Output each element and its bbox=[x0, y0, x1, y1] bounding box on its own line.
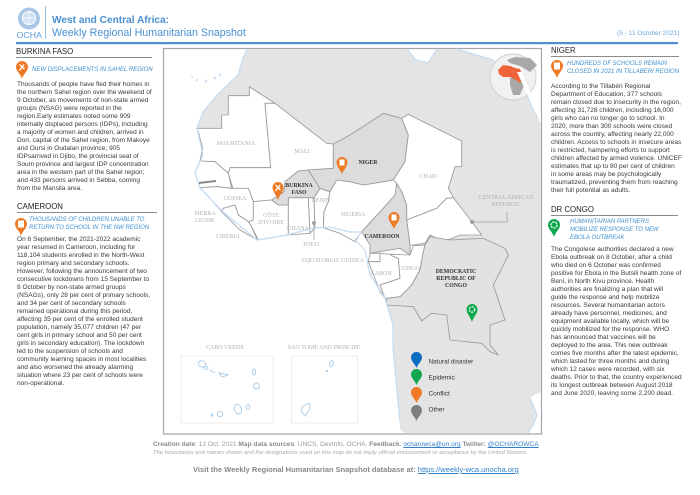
Equatorial Guinea bbox=[368, 253, 380, 262]
text: DR Congo: and June 2020, leaving some 2,200 dead. bbox=[551, 390, 673, 397]
country labels: BENIN bbox=[312, 198, 331, 204]
headline: DR Congo: HUMANITARIAN PARTNERS bbox=[570, 219, 649, 225]
text: Niger bbox=[551, 83, 682, 194]
text: DR Congo: guide the response and help mobilize bbox=[551, 294, 659, 301]
text: Cameroon: 118,104 students enrolled in the North-West bbox=[17, 252, 144, 259]
country labels: CONGO bbox=[398, 266, 420, 272]
subtitle: Weekly Regional Humanitarian Snapshot bbox=[52, 27, 246, 39]
headline: DR Congo bbox=[570, 218, 659, 241]
text: Cameroon: region primary and secondary schools. bbox=[17, 260, 129, 267]
Togo bbox=[308, 198, 315, 233]
text: Cameroon: consecutive lockdowns from 15 September to bbox=[17, 276, 149, 283]
pin: Cameroon schools bbox=[388, 212, 400, 229]
country labels: REPUBLIC bbox=[491, 202, 521, 208]
country labels: FASO bbox=[291, 190, 307, 196]
Cameroon bbox=[362, 183, 410, 255]
text: Cameroon: 8 October by non-state armed groups bbox=[17, 284, 126, 291]
text: Niger: 2020, more than 300 schools were closed bbox=[551, 123, 672, 130]
Central African borders bbox=[368, 237, 508, 355]
country labels bbox=[194, 141, 534, 351]
text: Cameroon: population, namely 35,077 children (47 per bbox=[17, 324, 141, 331]
text: Niger: According to the Tillabéri Regional bbox=[551, 83, 650, 90]
Chad bbox=[393, 114, 462, 220]
text: Niger: girls who can no longer go to school. In bbox=[551, 115, 665, 122]
text: DR Congo: has announced that vaccines will be bbox=[551, 334, 656, 341]
country labels: GABON bbox=[370, 271, 392, 277]
text: DR Congo: its longest outbreak between August 2018 bbox=[551, 382, 673, 389]
heading: Niger: NIGER bbox=[551, 46, 576, 55]
legend bbox=[411, 352, 474, 421]
Benin bbox=[314, 188, 330, 228]
footer credits: Creation date: 12 Oct. 2021 Map data sources: UNCS, DevInfo, OCHA. Feedback: ocharowca@un.org Twitter: @OCHAROWCA bbox=[153, 441, 539, 448]
Mauritania bbox=[197, 87, 275, 173]
text: DR Congo: Beni, in North Kivu province. Health bbox=[551, 278, 654, 285]
country labels: CÔTE bbox=[263, 211, 279, 219]
text: Cameroon: On 6 September, the 2021-2022 academic bbox=[17, 236, 140, 243]
country labels: GUINEA bbox=[224, 196, 247, 202]
headline: DR Congo: MOBILIZE RESPONSE TO NEW bbox=[570, 227, 659, 233]
text: DR Congo: comes five months after the latest epidemic, bbox=[551, 350, 679, 357]
text: DR Congo: deployed to the area. This new outbreak bbox=[551, 342, 668, 349]
text: Burkina Faso: Thousands of people have fled their homes in bbox=[17, 81, 149, 88]
text: Cameroon: community learning spaces in most localities bbox=[17, 356, 146, 363]
country labels: NIGERIA bbox=[341, 212, 366, 218]
country labels: MAURITANIA bbox=[217, 141, 256, 147]
country labels: NIGER bbox=[358, 160, 378, 166]
text: DR Congo: positive for Ebola in the Butsili health zone of bbox=[551, 270, 681, 277]
heading: Burkina Faso: BURKINA FASO bbox=[16, 47, 73, 56]
country labels: CAMEROON bbox=[364, 234, 400, 240]
text: Cameroon: affecting 35 per cent of the enrolled student bbox=[17, 316, 143, 323]
text: Cameroon: and 34 per cent of secondary schools bbox=[17, 300, 126, 307]
Burkina Faso bbox=[272, 170, 320, 205]
text: Niger: children. Access to schools in insecure areas bbox=[551, 139, 681, 146]
text: Burkina Faso: groups (NSAG) were reported in the bbox=[17, 105, 122, 112]
text: DR Congo: already have personnel, medicines, and bbox=[551, 310, 667, 317]
text: Niger: affecting 31,728 children, including 16,000 bbox=[551, 107, 674, 114]
legend: other: Other bbox=[428, 406, 445, 414]
Ghana bbox=[288, 198, 310, 235]
text: DR Congo: authorities are finalizing a plan that will bbox=[551, 286, 663, 293]
pin: Niger schools bbox=[336, 157, 348, 174]
headline: Cameroon: THOUSANDS OF CHILDREN UNABLE TO bbox=[29, 217, 144, 223]
logo: OCHA: OCHA bbox=[16, 31, 43, 40]
country labels: CONGO bbox=[445, 283, 467, 289]
Gambia river bbox=[199, 180, 216, 184]
panel: DR Congo bbox=[551, 205, 682, 397]
header rule bbox=[16, 42, 678, 44]
text: Burkina Faso: a majority of women and children, arrived in bbox=[17, 129, 144, 136]
text: Niger: remain closed due to insecurity in the region, bbox=[551, 99, 681, 106]
icon: Niger school pin bbox=[551, 60, 563, 78]
country labels: LEONE bbox=[195, 218, 215, 224]
text: DR Congo: which lasted for three months and during bbox=[551, 358, 669, 365]
country labels: SAO TOME AND PRINCIPE bbox=[288, 345, 361, 351]
Gabon bbox=[368, 253, 400, 298]
coast highlights bbox=[195, 49, 541, 433]
text: Cameroon: situation where 23 per cent of schools were bbox=[17, 372, 143, 379]
text: Burkina Faso: the northern Sahel region over the weekend of bbox=[17, 89, 152, 96]
pin: Burkina Faso conflict bbox=[272, 182, 284, 200]
text: Burkina Faso: Soum province and largest IDP concentration bbox=[17, 161, 149, 168]
text: Cameroon: led to the suspension of schools and bbox=[17, 348, 123, 355]
headline: Cameroon: RETURN TO SCHOOL IN THE NW REGION bbox=[29, 225, 149, 231]
Liberia bbox=[222, 205, 257, 240]
country labels: D'IVOIRE bbox=[258, 220, 284, 226]
headline: Burkina Faso: NEW DISPLACEMENTS IN SAHEL REGION bbox=[32, 66, 153, 72]
country labels: LIBERIA bbox=[216, 234, 240, 240]
legend: natural disaster: Natural disaster bbox=[428, 358, 474, 366]
icon: Cameroon school pin bbox=[15, 218, 27, 236]
text: Burkina Faso: Dori, capital of the Sahel region, from Makoye bbox=[17, 137, 150, 144]
panel: Cameroon bbox=[17, 202, 150, 387]
text: Cameroon: and also worsened the already alarming bbox=[17, 364, 133, 371]
inset: Cabo Verde bbox=[181, 356, 273, 423]
text: Niger: estimates that up to 80 per cent of children bbox=[551, 163, 675, 170]
text: Burkina Faso: and 433 persons arrived in Sebba, coming bbox=[17, 177, 140, 184]
text: Niger: children affected by armed violence. UNICEF bbox=[551, 155, 682, 162]
heading: Cameroon: CAMEROON bbox=[17, 202, 63, 211]
headline: Cameroon bbox=[29, 216, 150, 231]
text: Cameroon: girls in secondary education). The lockdown bbox=[17, 340, 144, 347]
icon: DRC epidemic pin bbox=[548, 219, 560, 237]
Guinea bbox=[200, 187, 253, 222]
text: Burkina Faso: IDPsarrived in Djibo, the provincial seat of bbox=[17, 153, 139, 160]
country labels: CENTRAL AFRICAN bbox=[479, 195, 534, 201]
text: DR Congo bbox=[551, 246, 682, 397]
country labels: SIERRA bbox=[194, 211, 216, 217]
text: DR Congo: resources. Several humanitarian actors bbox=[551, 302, 665, 309]
logo: OCHA bbox=[16, 6, 46, 40]
text: Cameroon: cent girls in primary school and 50 per cent bbox=[17, 332, 142, 339]
country labels: MALI bbox=[294, 149, 310, 155]
text: Niger: in some areas may be psychologically bbox=[551, 171, 661, 178]
text: Niger: their full potential as adults. bbox=[551, 187, 630, 194]
text: Cameroon: remained operational during this period, bbox=[17, 308, 132, 315]
text: DR Congo: deaths. Prior to that, the country experienced bbox=[551, 374, 682, 381]
text: DR Congo: who died on 6 October was confirmed bbox=[551, 262, 661, 269]
text: Burkina Faso: internally displaced persons (IDPs), including bbox=[17, 121, 148, 128]
text: Burkina Faso: 9 October, as movements of non-state armed bbox=[17, 97, 148, 104]
text: DR Congo: quickly mobilized for the response. WHO bbox=[551, 326, 669, 333]
inset: Sao Tome and Principe bbox=[292, 356, 358, 423]
text: DR Congo: Ebola outbreak on 8 October, after a child bbox=[551, 254, 672, 261]
text: DR Congo: equipment available locally, which will be bbox=[551, 318, 669, 325]
Niger bbox=[308, 113, 408, 192]
West African borders bbox=[195, 87, 482, 255]
headline: Niger: CLOSED IN 2021 IN TILLABERI REGION bbox=[567, 69, 679, 75]
panel: Burkina Faso bbox=[16, 47, 153, 192]
Canary Islands bbox=[191, 74, 222, 82]
country labels: DEMOCRATIC bbox=[436, 269, 476, 275]
text: Niger: is restricted, hampering efforts to support bbox=[551, 147, 670, 154]
text: Cameroon: non-operational. bbox=[17, 380, 64, 387]
land: northern, eastern and southern Africa bbox=[197, 49, 541, 433]
text: Burkina Faso: area in the western part of the Sahel region; bbox=[17, 169, 144, 176]
country labels: REPUBLIC OF bbox=[436, 276, 476, 282]
title: West and Central Africa: bbox=[52, 15, 169, 26]
text: Cameroon: year resumed in Cameroon, including for bbox=[17, 244, 135, 251]
text: Niger: Department of Education, 377 schools bbox=[551, 91, 662, 98]
text: Cameroon: However, following the announcement of two bbox=[17, 268, 147, 275]
Senegal bbox=[195, 161, 232, 188]
headline: DR Congo: EBOLA OUTBREAK bbox=[570, 235, 624, 241]
DRC bbox=[387, 237, 508, 355]
Nigeria bbox=[323, 180, 407, 242]
text: Burkina Faso bbox=[17, 81, 152, 192]
text: Cameroon bbox=[17, 236, 150, 387]
footer disclaimer: The boundaries and names shown and the designations used on this map do not imply official endorsement or acceptance by the United Nations. bbox=[153, 450, 528, 456]
text: DR Congo: The Congolese authorities declared a new bbox=[551, 246, 674, 253]
heading: DR Congo: DR CONGO bbox=[551, 205, 594, 214]
legend: epidemic: Epidemic bbox=[428, 374, 456, 382]
text: Cameroon: (NSAGs), only 28 per cent of primary schools, bbox=[17, 292, 150, 299]
text: Niger: across the country, affecting nearly 22,000 bbox=[551, 131, 674, 138]
panel: Niger bbox=[551, 46, 682, 194]
pin: DRC Ebola bbox=[466, 304, 478, 322]
country labels: CHAD bbox=[419, 174, 437, 180]
country labels: BURKINA bbox=[285, 183, 313, 189]
Central African Republic bbox=[407, 198, 482, 245]
text: Burkina Faso: region.Early estimates noted some 909 bbox=[17, 113, 131, 120]
country labels: EQUATORIAL GUINEA bbox=[302, 258, 365, 264]
text: Niger: traumatized, preventing them from reaching bbox=[551, 179, 678, 186]
country labels: CABO VERDE bbox=[206, 345, 244, 351]
headline: Niger: HUNDREDS OF SCHOOLS REMAIN bbox=[567, 61, 667, 67]
inset locator: Africa bbox=[490, 54, 541, 124]
text: DR Congo: which 12 cases were recorded, with six bbox=[551, 366, 665, 373]
Cote d'Ivoire bbox=[248, 200, 288, 240]
text: Burkina Faso: and Oursi in Oudalan province; 905 bbox=[17, 145, 120, 152]
database link: Visit the Weekly Regional Humanitarian Snapshot database at: https://weekly-wca.unocha.org bbox=[193, 465, 519, 474]
country labels: TOGO bbox=[303, 242, 320, 248]
headline: Niger bbox=[567, 60, 680, 75]
leader lines bbox=[312, 212, 507, 240]
Mali bbox=[228, 103, 333, 202]
text: Burkina Faso: from the Mansila area. bbox=[17, 185, 82, 192]
legend: conflict: Conflict bbox=[428, 390, 450, 398]
Congo bbox=[380, 245, 425, 298]
country labels: GHANA bbox=[287, 226, 309, 232]
date range: (5 - 11 October 2021) bbox=[617, 30, 680, 37]
icon: Burkina conflict pin bbox=[16, 61, 28, 78]
